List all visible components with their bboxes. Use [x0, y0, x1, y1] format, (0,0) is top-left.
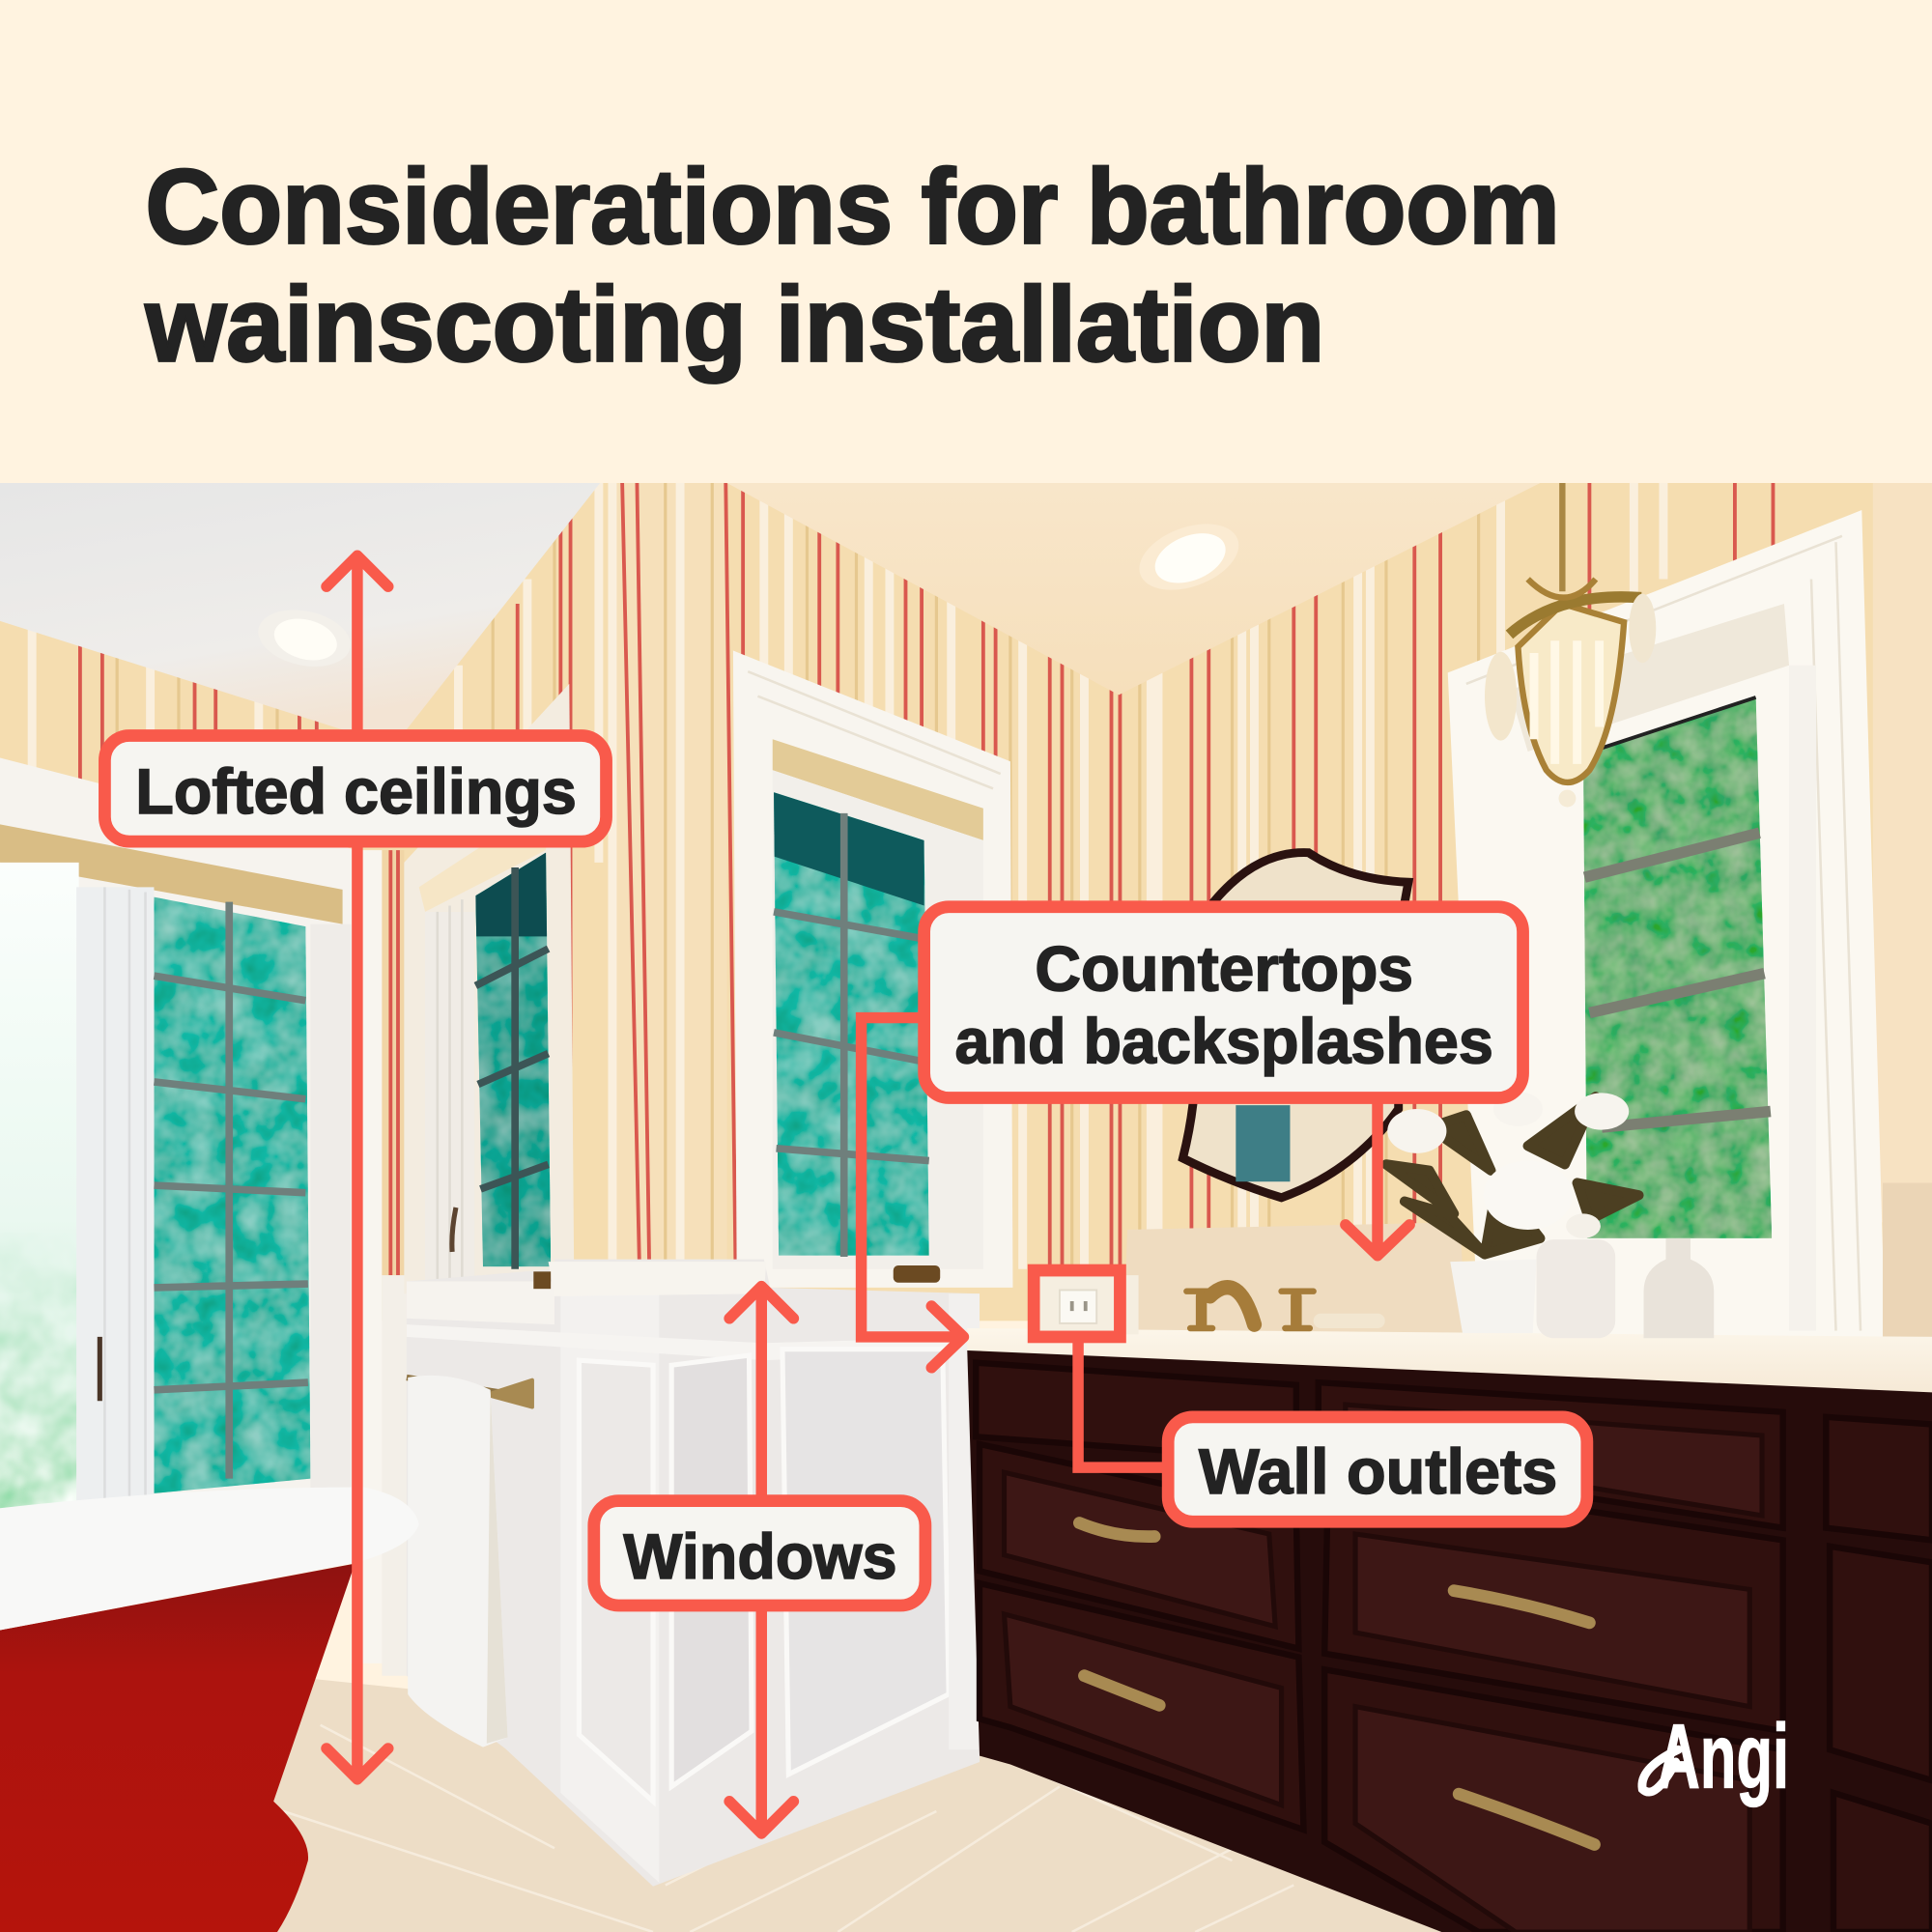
outlet trim and plate [1033, 1275, 1139, 1334]
mirror [1182, 853, 1408, 1198]
right ceiling [727, 483, 1540, 695]
vases and bottle [1450, 1238, 1714, 1338]
drawer handles [1079, 1523, 1595, 1844]
label box: Lofted ceilings [135, 756, 577, 828]
logo: Angi [1642, 1707, 1789, 1808]
left ceiling [0, 483, 600, 734]
label box: and backsplashes [955, 1007, 1493, 1078]
floor [246, 1676, 1479, 1932]
window latch hardware [533, 1265, 940, 1289]
sink faucet [1186, 1288, 1378, 1328]
backsplash [1123, 1182, 1932, 1337]
title [145, 148, 1560, 384]
annotation: lofted ceilings [104, 555, 607, 1779]
wainscoting panels [407, 1260, 980, 1887]
label box [594, 1501, 925, 1605]
double arrow [729, 1287, 793, 1833]
label box [924, 907, 1523, 1097]
annotation: countertops and backsplashes [862, 907, 1523, 1368]
recessed ceiling lights [253, 511, 1248, 674]
label box [104, 735, 607, 841]
label box: Countertops [1035, 934, 1413, 1006]
annotation: wall outlets [1034, 1270, 1587, 1521]
title: Considerations for bathroom [146, 148, 1560, 266]
label box: Windows [623, 1521, 897, 1593]
right window [1448, 510, 1886, 1337]
down arrow to backsplash [1346, 1099, 1409, 1256]
annotation: windows [594, 1287, 925, 1833]
bathtub [0, 1488, 419, 1932]
bathroom scene photo illustration [0, 483, 1932, 1932]
label box [1168, 1417, 1587, 1521]
countertop [967, 1328, 1932, 1392]
vanity cabinet [967, 1350, 1932, 1932]
title: wainscoting installation [145, 267, 1324, 384]
connector line [1078, 1341, 1171, 1467]
towel bar and towel [407, 1376, 532, 1747]
elbow arrow to countertop [862, 1018, 958, 1337]
double arrow [327, 555, 388, 1779]
outlet highlight square [1034, 1270, 1120, 1337]
striped wallpaper wall [0, 483, 1932, 1321]
center window [733, 650, 1012, 1288]
logo: Angi: Angi [1658, 1707, 1789, 1808]
chandelier [1485, 483, 1656, 807]
label box: Wall outlets [1199, 1436, 1557, 1508]
header background [0, 0, 1932, 483]
middle window [404, 684, 574, 1293]
left window [0, 757, 409, 1676]
flowers [1386, 1092, 1638, 1254]
